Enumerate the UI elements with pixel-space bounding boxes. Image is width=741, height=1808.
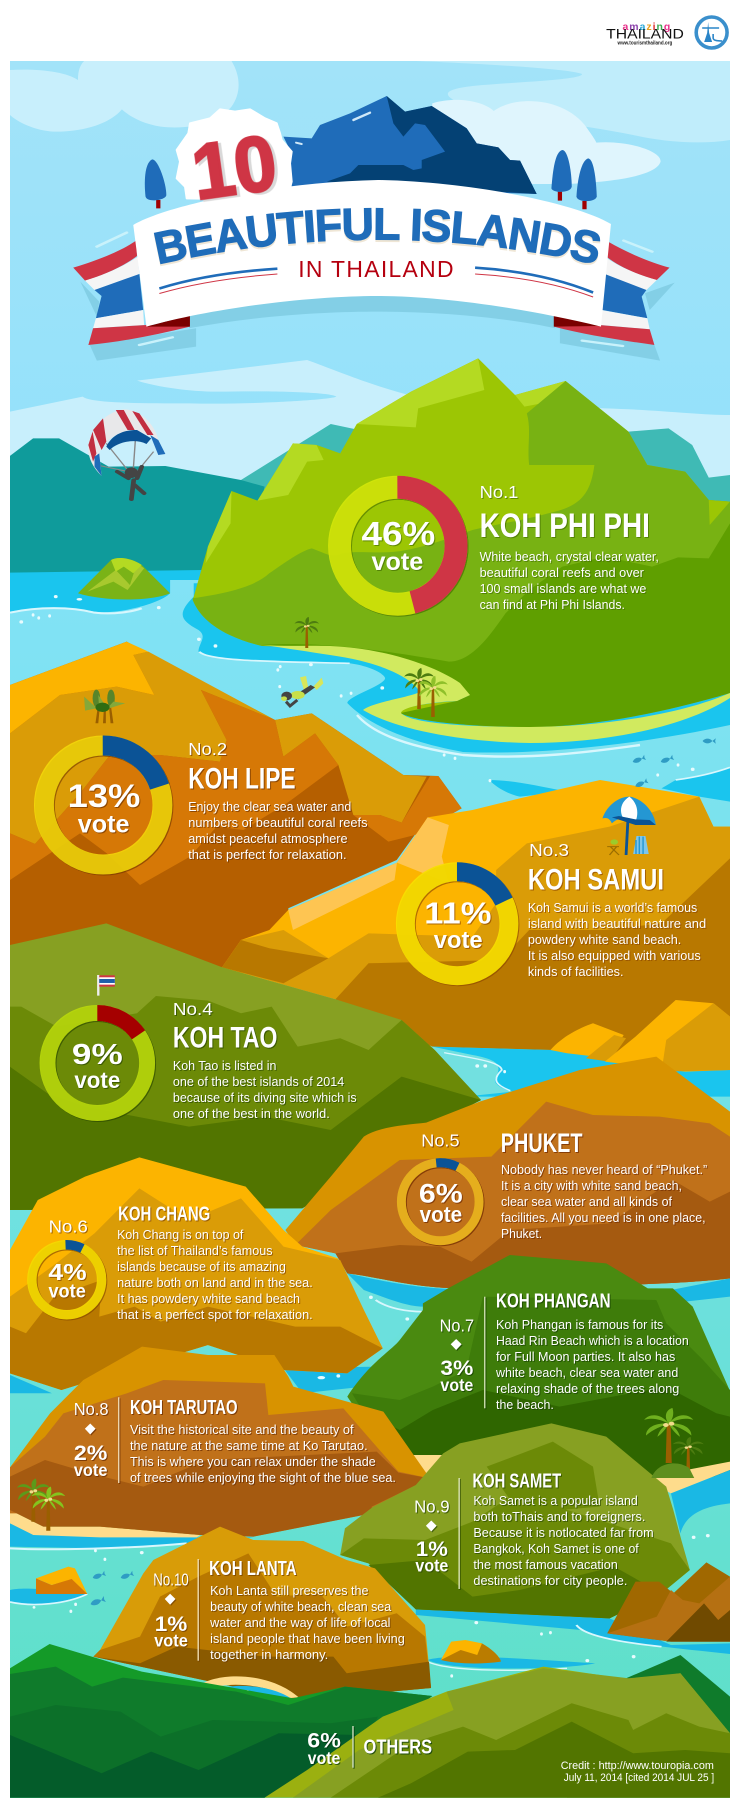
credit: July 11, 2014 [cited 2014 JUL 25 ] bbox=[564, 1772, 714, 1784]
sky bbox=[10, 61, 730, 415]
panel: Koh Phi Phi bbox=[340, 482, 659, 612]
panel: Koh Lipe bbox=[44, 739, 368, 864]
description: can find at Phi Phi Islands. bbox=[480, 597, 625, 612]
description: water and the way of life of local bbox=[209, 1615, 391, 1630]
description bbox=[188, 799, 368, 862]
percentage: vote bbox=[372, 548, 423, 576]
description bbox=[130, 1422, 396, 1485]
description bbox=[495, 1317, 689, 1412]
Koh Tarutao island bbox=[10, 1347, 430, 1549]
water around Koh Phi Phi bbox=[10, 570, 730, 753]
heading: KOH PHANGAN bbox=[496, 1290, 611, 1312]
sea bbox=[10, 575, 730, 1798]
percentage: vote bbox=[48, 1281, 86, 1302]
panel: Koh Chang bbox=[31, 1204, 313, 1322]
rank and vote: No.7 bbox=[440, 1316, 474, 1336]
description: Koh Samet is a popular island bbox=[473, 1493, 638, 1508]
icon: diver bbox=[281, 676, 323, 706]
description: Koh Tao is listed in bbox=[173, 1058, 276, 1073]
logos bbox=[606, 17, 727, 48]
donut chart 6% bbox=[398, 1159, 483, 1245]
water patches middle bbox=[10, 1270, 730, 1393]
description: Because it is notlocated far from bbox=[473, 1525, 654, 1540]
description: because of its diving site which is bbox=[173, 1090, 357, 1105]
heading: KOH LIPE bbox=[188, 763, 296, 796]
Koh Chang island bbox=[10, 1157, 383, 1390]
small rock bbox=[428, 1640, 595, 1670]
percentage bbox=[419, 1178, 463, 1227]
description: kinds of facilities. bbox=[528, 964, 623, 979]
rank and vote bbox=[153, 1569, 189, 1651]
sand and water near Koh Samet bbox=[411, 1455, 730, 1654]
vote: 6% bbox=[307, 1730, 341, 1753]
bubbles and fish bbox=[19, 595, 716, 1693]
description: one of the best islands of 2014 bbox=[173, 1074, 344, 1089]
panel: Koh Tao bbox=[48, 999, 357, 1121]
vote bbox=[307, 1730, 341, 1768]
description: Enjoy the clear sea water and bbox=[188, 799, 351, 814]
description: numbers of beautiful coral reefs bbox=[188, 815, 368, 830]
description: both toThais and to foreigners. bbox=[473, 1509, 645, 1524]
description: facilities. All you need is in one place, bbox=[501, 1210, 706, 1225]
heading: KOH LANTA bbox=[209, 1558, 297, 1580]
panel: Phuket bbox=[398, 1128, 707, 1245]
foam below beach bbox=[357, 715, 640, 757]
description: Haad Rin Beach which is a location bbox=[496, 1333, 689, 1348]
description bbox=[480, 549, 659, 612]
lagoon at Koh Lanta bbox=[204, 1676, 298, 1698]
percentage bbox=[362, 515, 435, 576]
description: the list of Thailand’s famous bbox=[117, 1243, 273, 1258]
heading: KOH PHI PHI bbox=[480, 507, 650, 545]
divider bbox=[352, 1726, 354, 1768]
ribbon bbox=[133, 180, 611, 327]
rocks right bbox=[607, 1562, 730, 1642]
donut chart 13% bbox=[44, 746, 162, 864]
rank and vote bbox=[440, 1316, 474, 1395]
rank and vote: vote bbox=[154, 1631, 188, 1651]
Koh Lanta island bbox=[93, 1527, 431, 1700]
donut chart 46% bbox=[340, 487, 456, 604]
rank and vote: 1% bbox=[155, 1613, 188, 1636]
description: Phuket. bbox=[501, 1226, 542, 1241]
rank and vote: vote bbox=[415, 1556, 448, 1576]
Koh Tao island bbox=[10, 923, 481, 1210]
back mountains bbox=[10, 424, 730, 575]
Phuket island bbox=[285, 1057, 730, 1288]
icon: beach umbrella and chair bbox=[602, 797, 656, 855]
credit: Credit : http://www.touropia.com bbox=[561, 1760, 714, 1772]
donut chart 4% bbox=[31, 1243, 103, 1316]
small island left bbox=[10, 1567, 87, 1605]
clouds bbox=[10, 61, 730, 184]
icon: palm trees on Phi Phi bbox=[294, 617, 448, 717]
heading: KOH SAMET bbox=[473, 1470, 561, 1492]
percentage bbox=[68, 778, 140, 839]
description: nature both on land and in the sea. bbox=[117, 1275, 313, 1290]
description: clear sea water and all kinds of bbox=[501, 1194, 672, 1209]
description: This is where you can relax under the shade bbox=[130, 1454, 376, 1469]
logo: Amazing Thailand: www.tourismthailand.org bbox=[617, 40, 672, 47]
description: relaxing shade of the trees along bbox=[496, 1381, 679, 1396]
percentage: 9% bbox=[72, 1039, 123, 1071]
panel: Others bbox=[307, 1726, 432, 1768]
description: of trees while enjoying the sight of the blue sea. bbox=[130, 1470, 396, 1485]
panel: Koh Phangan bbox=[440, 1290, 689, 1412]
rocks near Koh Samui bbox=[432, 1000, 730, 1100]
rank and vote: 3% bbox=[440, 1357, 474, 1380]
description: one of the best in the world. bbox=[173, 1106, 330, 1121]
description: Nobody has never heard of “Phuket.” bbox=[501, 1162, 707, 1177]
description bbox=[173, 1058, 357, 1121]
rank and vote: vote bbox=[440, 1375, 473, 1395]
vote: vote bbox=[308, 1748, 340, 1768]
mountain behind title bbox=[283, 96, 537, 194]
rank and vote: vote bbox=[74, 1460, 107, 1480]
description: Koh Chang is on top of bbox=[117, 1227, 244, 1242]
description: Koh Phangan is famous for its bbox=[496, 1317, 664, 1332]
heading: KOH TAO bbox=[173, 1021, 277, 1054]
heading: KOH TARUTAO bbox=[130, 1397, 238, 1419]
description: destinations for city people. bbox=[473, 1573, 627, 1588]
description: Visit the historical site and the beauty of bbox=[130, 1422, 354, 1437]
divider bbox=[198, 1559, 199, 1661]
percentage bbox=[424, 895, 491, 954]
Koh Phi Phi island bbox=[193, 358, 730, 727]
logo: Amazing Thailand bbox=[606, 22, 684, 47]
description: amidst peaceful atmosphere bbox=[188, 831, 348, 846]
trees bbox=[145, 150, 597, 209]
heading: PHUKET bbox=[501, 1128, 583, 1158]
rank: No.3 bbox=[529, 840, 569, 860]
percentage: 6% bbox=[419, 1178, 463, 1208]
donut chart 9% bbox=[48, 1013, 147, 1113]
rank: No.6 bbox=[49, 1216, 88, 1236]
percentage: vote bbox=[78, 811, 130, 839]
description: islands because of its amazing bbox=[117, 1259, 286, 1274]
rank and vote: No.8 bbox=[74, 1399, 109, 1419]
percentage: vote bbox=[74, 1067, 120, 1093]
description: white beach, clear sea water and bbox=[495, 1365, 678, 1380]
percentage: 4% bbox=[48, 1259, 87, 1285]
Koh Lipe island bbox=[10, 642, 462, 973]
description: the most famous vacation bbox=[473, 1557, 618, 1572]
credit bbox=[561, 1760, 714, 1784]
description bbox=[117, 1227, 313, 1322]
rank and vote: 1% bbox=[416, 1538, 448, 1561]
rank: No.4 bbox=[173, 999, 213, 1019]
logo: Amazing Thailand: amazing bbox=[622, 22, 670, 33]
description: Bangkok, Koh Samet is one of bbox=[473, 1541, 639, 1556]
percentage bbox=[48, 1259, 87, 1302]
ribbon tails bbox=[73, 233, 675, 361]
small island bbox=[78, 558, 170, 600]
panel: Koh Tarutao bbox=[74, 1397, 396, 1485]
percentage: vote bbox=[420, 1202, 462, 1227]
heading: OTHERS bbox=[364, 1736, 432, 1758]
decorative ribbon lines bbox=[159, 268, 593, 297]
Koh Samet island bbox=[340, 1423, 690, 1618]
bottom green mountains bbox=[10, 1644, 730, 1798]
starburst badge bbox=[177, 109, 292, 200]
rank and vote: 2% bbox=[74, 1442, 108, 1465]
heading: KOH CHANG bbox=[118, 1204, 210, 1226]
description: beauty of white beach, clean sea bbox=[210, 1599, 392, 1614]
panel: Koh Samui bbox=[405, 840, 706, 979]
panel: Koh Samet bbox=[414, 1470, 654, 1589]
divider bbox=[458, 1478, 460, 1589]
description: island with beautiful nature and bbox=[528, 916, 706, 931]
description: together in harmony. bbox=[210, 1647, 328, 1662]
percentage: 46% bbox=[362, 515, 435, 552]
description: powdery white sand beach. bbox=[528, 932, 681, 947]
heading: KOH SAMUI bbox=[528, 863, 664, 896]
Koh Samui island bbox=[222, 780, 730, 1063]
description: beautiful coral reefs and over bbox=[480, 565, 645, 580]
icon: palm trees on Tarutao bbox=[17, 1478, 65, 1531]
percentage bbox=[72, 1039, 123, 1093]
description bbox=[501, 1162, 707, 1241]
logo: Amazing Thailand: THAILAND bbox=[606, 25, 684, 42]
icon: Thai flag bbox=[98, 975, 115, 996]
number 10: 10 bbox=[187, 119, 282, 216]
title banner bbox=[73, 96, 674, 360]
rank and vote: No.9 bbox=[414, 1496, 450, 1516]
percentage: 13% bbox=[68, 778, 140, 814]
rank and vote bbox=[74, 1399, 109, 1480]
percentage: vote bbox=[434, 927, 483, 954]
description: the nature at the same time at Ko Tarutao. bbox=[130, 1438, 368, 1453]
description: It is also equipped with various bbox=[528, 948, 701, 963]
divider bbox=[118, 1397, 119, 1483]
description bbox=[528, 900, 706, 979]
rank and vote bbox=[414, 1496, 450, 1576]
subheading: In Thailand: IN THAILAND bbox=[298, 256, 454, 282]
description: that is a perfect spot for relaxation. bbox=[117, 1307, 313, 1322]
description: It has powdery white sand beach bbox=[117, 1291, 300, 1306]
description: for Full Moon parties. It also has bbox=[496, 1349, 676, 1364]
description bbox=[209, 1583, 405, 1662]
description: the beach. bbox=[496, 1397, 554, 1412]
rank: No.1 bbox=[480, 482, 518, 502]
beach bbox=[263, 645, 730, 743]
donut chart 11% bbox=[405, 872, 509, 976]
divider bbox=[484, 1297, 485, 1408]
Koh Phangan island bbox=[347, 1255, 730, 1477]
heading: Beautiful Islands: BEAUTIFUL ISLANDS bbox=[154, 208, 600, 266]
rank: No.5 bbox=[421, 1131, 460, 1151]
lower clouds bbox=[10, 360, 730, 480]
water patch right bbox=[489, 767, 730, 802]
rank and vote: No.10 bbox=[153, 1569, 189, 1589]
description: 100 small islands are what we bbox=[480, 581, 646, 596]
description: White beach, crystal clear water, bbox=[480, 549, 659, 564]
percentage: 11% bbox=[424, 895, 491, 930]
description: It is a city with white sand beach, bbox=[501, 1178, 682, 1193]
icon: palms on Koh Lipe bbox=[84, 690, 125, 723]
description bbox=[473, 1493, 654, 1588]
panel: Koh Lanta bbox=[153, 1558, 405, 1662]
description: Koh Samui is a world’s famous bbox=[528, 900, 698, 915]
rank: No.2 bbox=[188, 739, 227, 759]
icon: palms on Samet bbox=[644, 1408, 704, 1478]
icon: parachutist bbox=[88, 409, 165, 499]
description: Koh Lanta still preserves the bbox=[210, 1583, 369, 1598]
description: island people that have been living bbox=[210, 1631, 405, 1646]
logo: circular seal bbox=[696, 17, 727, 48]
description: that is perfect for relaxation. bbox=[188, 847, 347, 862]
